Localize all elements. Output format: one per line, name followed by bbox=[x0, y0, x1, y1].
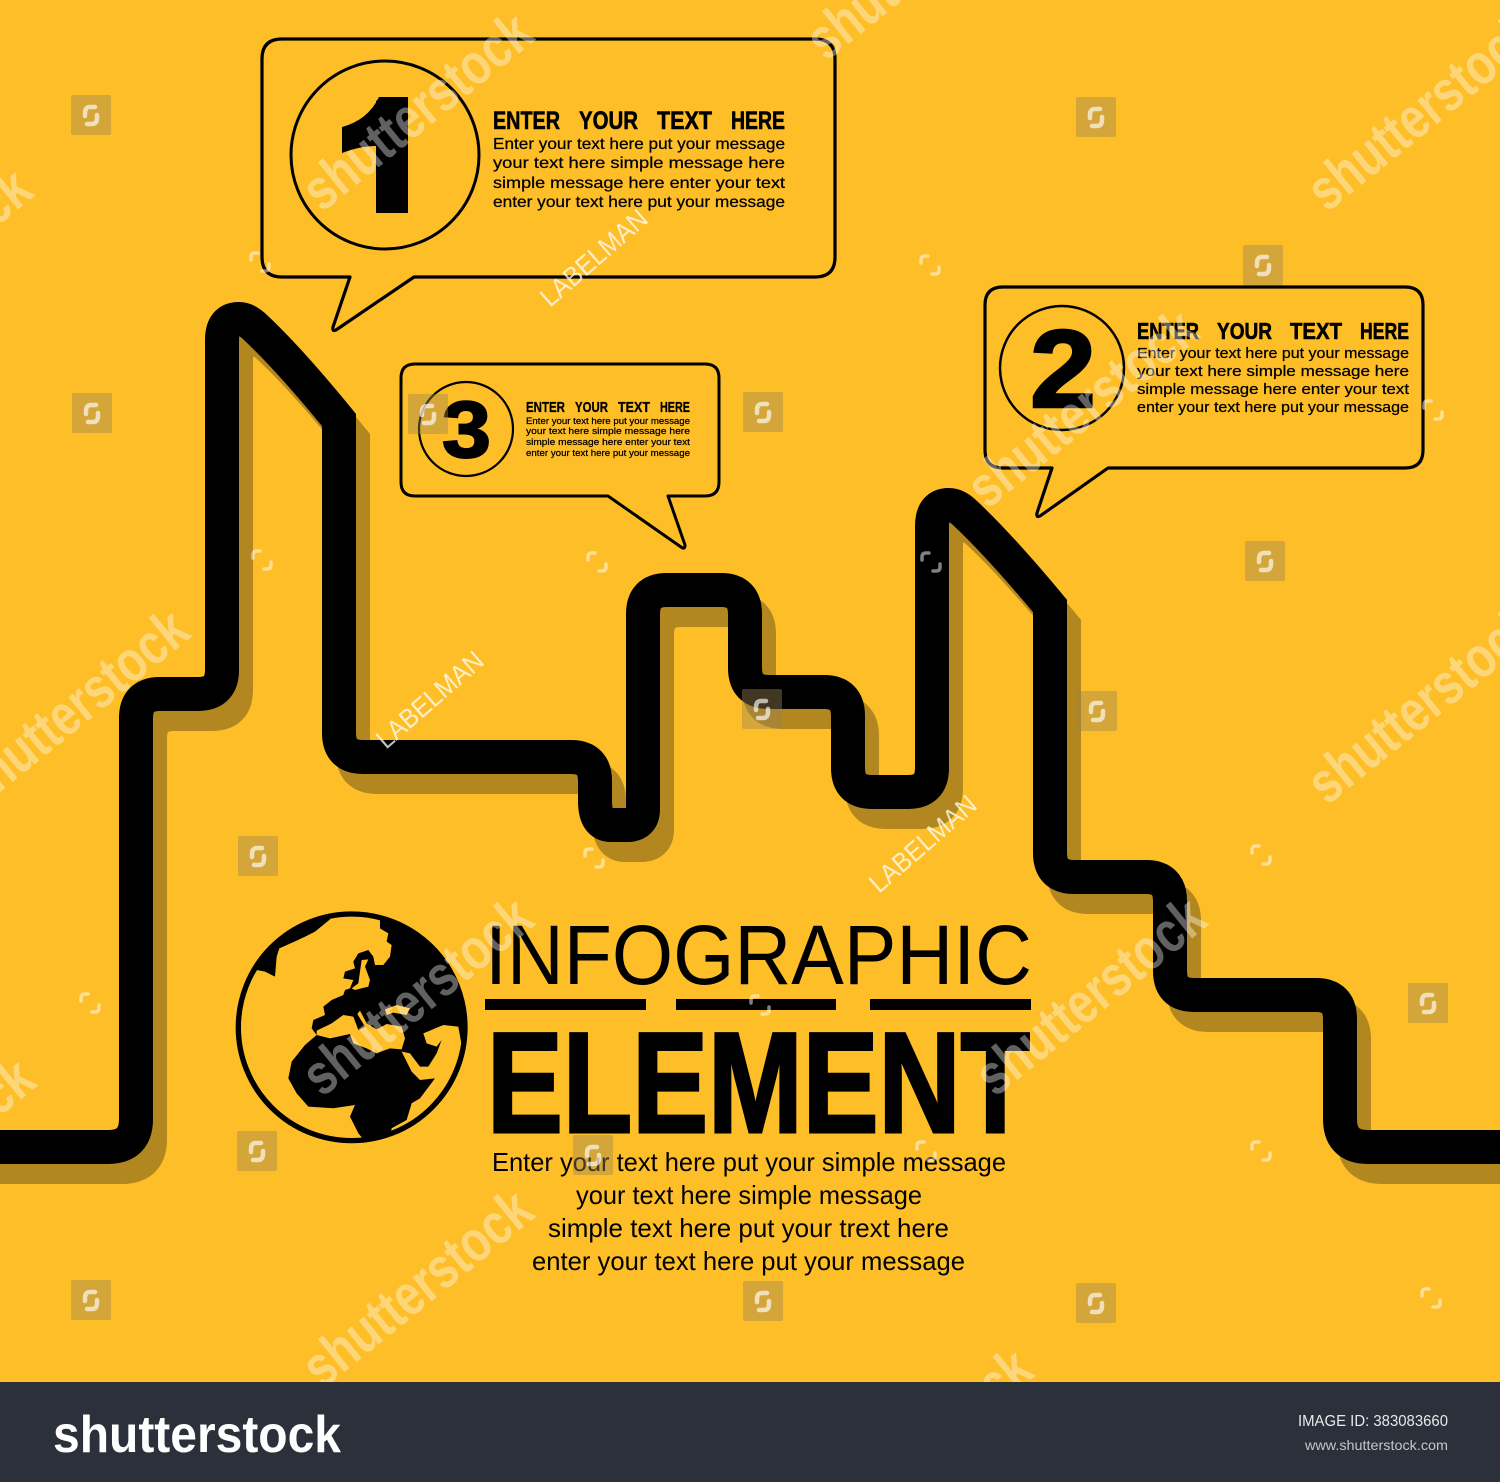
callout 3 body text: Enter your text here put your message bbox=[526, 416, 690, 427]
callout 1 heading: YOUR bbox=[579, 107, 638, 135]
skyline line shadow bbox=[0, 339, 1500, 1167]
subtitle text block: enter your text here put your message bbox=[532, 1246, 965, 1276]
watermark logos: LABELMAN bbox=[370, 645, 490, 755]
callout 2 body text bbox=[1137, 345, 1410, 416]
callout 1 heading: TEXT bbox=[657, 107, 712, 135]
callout 3 heading: TEXT bbox=[618, 399, 650, 416]
watermark logos: LABELMAN bbox=[534, 203, 654, 313]
callout 3 body text bbox=[526, 416, 690, 459]
title divider bars bbox=[485, 999, 1031, 1010]
subtitle text block: simple text here put your trext here bbox=[548, 1213, 949, 1243]
title: infographic: INFOGRAPHIC bbox=[485, 908, 1032, 1002]
callout 3 number badge bbox=[419, 382, 513, 476]
footer logo: shutterstock bbox=[53, 1406, 341, 1464]
callout 1 body text bbox=[493, 136, 786, 211]
callout 3 heading: HERE bbox=[660, 399, 690, 416]
callout 1 bubble bbox=[262, 39, 835, 331]
callout 1 body text: your text here simple message here bbox=[493, 155, 785, 172]
callout 2 body text: simple message here enter your text bbox=[1137, 381, 1410, 398]
callout 1 body text: Enter your text here put your message bbox=[493, 136, 785, 153]
callout 1 heading: ENTER bbox=[493, 107, 560, 135]
callout 2 heading: HERE bbox=[1360, 318, 1409, 344]
callout 3 heading: YOUR bbox=[575, 399, 608, 416]
callout 1 heading bbox=[493, 107, 785, 135]
callout 1 bbox=[262, 30, 835, 331]
watermark icons bbox=[71, 95, 1448, 1323]
callout 1 number badge bbox=[290, 60, 480, 250]
subtitle text block: Enter your text here put your simple message bbox=[492, 1147, 1006, 1177]
callout 3 heading: ENTER bbox=[526, 399, 565, 416]
callout 2 body text: Enter your text here put your message bbox=[1137, 345, 1409, 362]
icon: globe bbox=[236, 911, 468, 1144]
watermark logos: shutterstock bbox=[289, 1176, 545, 1400]
watermark logos: LABELMAN bbox=[863, 789, 983, 899]
callout 3 number badge: 3 bbox=[442, 385, 491, 474]
footer bar bbox=[0, 1382, 1500, 1482]
callout 2 bbox=[985, 287, 1423, 517]
callout 2 body text: your text here simple message here bbox=[1137, 363, 1409, 380]
callout 2 number badge: 2 bbox=[1030, 308, 1096, 431]
callout 1 heading: HERE bbox=[731, 107, 785, 135]
callout 3 bubble bbox=[401, 364, 719, 548]
callout 1 body text: simple message here enter your text bbox=[493, 175, 786, 192]
subtitle text block: your text here simple message bbox=[576, 1180, 922, 1210]
callout 2 body text: enter your text here put your message bbox=[1137, 399, 1409, 416]
footer image id: IMAGE ID: 383083660 bbox=[1298, 1413, 1448, 1430]
callout 1 body text: enter your text here put your message bbox=[493, 194, 785, 211]
callout 2 heading bbox=[1137, 318, 1409, 344]
watermark logos: ck bbox=[964, 1335, 1044, 1417]
callout 3 body text: your text here simple message here bbox=[526, 426, 690, 437]
footer url: www.shutterstock.com bbox=[1304, 1437, 1448, 1453]
callout 3 heading bbox=[526, 399, 690, 416]
callout 1 number badge: 1 bbox=[336, 30, 432, 259]
callout 2 heading: TEXT bbox=[1290, 318, 1342, 344]
callout 2 heading: ENTER bbox=[1137, 318, 1199, 344]
watermark logos: shutterstock bbox=[962, 884, 1218, 1108]
callout 3 bbox=[401, 364, 719, 548]
watermark logos: shutterstock bbox=[289, 884, 545, 1108]
title: element: ELEMENT bbox=[487, 1004, 1030, 1163]
subtitle text block bbox=[492, 1147, 1006, 1276]
callout 2 number badge bbox=[1000, 306, 1124, 431]
callout 2 bubble bbox=[985, 287, 1423, 517]
callout 2 heading: YOUR bbox=[1217, 318, 1272, 344]
watermark logos: shutterstock bbox=[954, 296, 1210, 520]
callout 3 body text: enter your text here put your message bbox=[526, 448, 690, 459]
callout 3 body text: simple message here enter your text bbox=[526, 437, 690, 448]
skyline line bbox=[0, 319, 1500, 1147]
